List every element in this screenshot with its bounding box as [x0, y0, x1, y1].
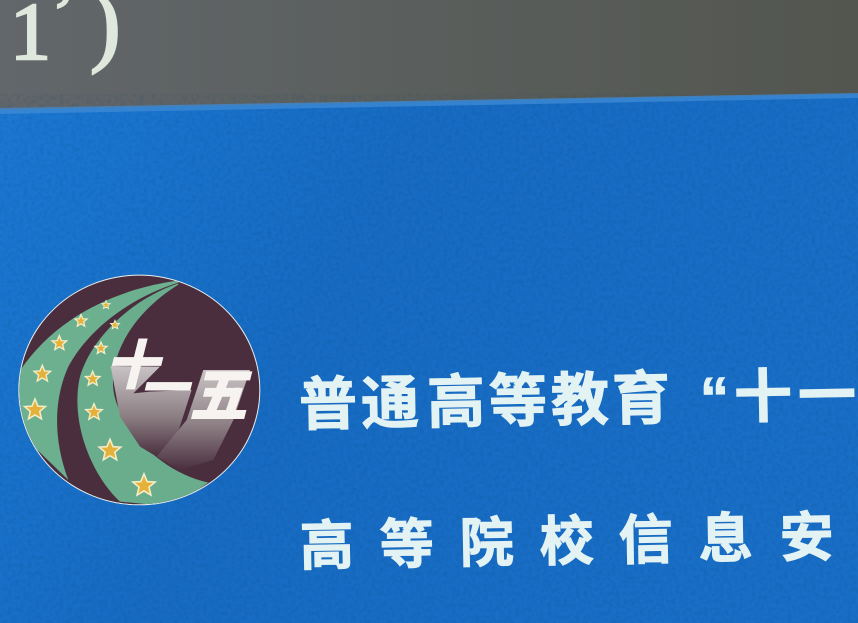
logo lettering 十一五 [103, 338, 259, 428]
heading: first title line: 教 [550, 368, 610, 434]
heading: second title line: 等 [379, 515, 434, 576]
heading: first title line [299, 363, 857, 438]
heading: second title line [299, 508, 834, 577]
heading: first title line: 普 [299, 372, 358, 438]
panel: dark grey upper background [0, 0, 858, 112]
heading: first title line: 一 [797, 363, 857, 429]
heading: second title line: 息 [698, 509, 753, 570]
logo lettering 十一五: 五 [187, 365, 259, 428]
heading: first title line: 育 [611, 367, 671, 433]
icon: round 十一五 logo [13, 270, 267, 510]
logo lettering 十一五: 十 [103, 338, 169, 395]
inner green crescent [77, 283, 208, 507]
heading: second title line: 高 [299, 516, 354, 577]
heading: second title line: 院 [459, 513, 514, 574]
gold stars [25, 301, 155, 495]
heading: first title line: 等 [488, 369, 548, 435]
heading: second title line: 信 [618, 510, 673, 571]
heading: first title line: “ [699, 366, 730, 431]
logo lettering 十一五: 一 [138, 363, 198, 415]
heading: second title line: 安 [779, 508, 834, 569]
heading: second title line: 校 [539, 512, 594, 573]
heading: first title line: 十 [733, 364, 793, 430]
text: partial top line ending in 1’) [10, 0, 121, 77]
heading: first title line: 通 [361, 371, 420, 437]
extruded letter shadows [111, 366, 250, 470]
heading: first title line: 高 [427, 370, 486, 436]
outer green crescent [13, 281, 178, 480]
